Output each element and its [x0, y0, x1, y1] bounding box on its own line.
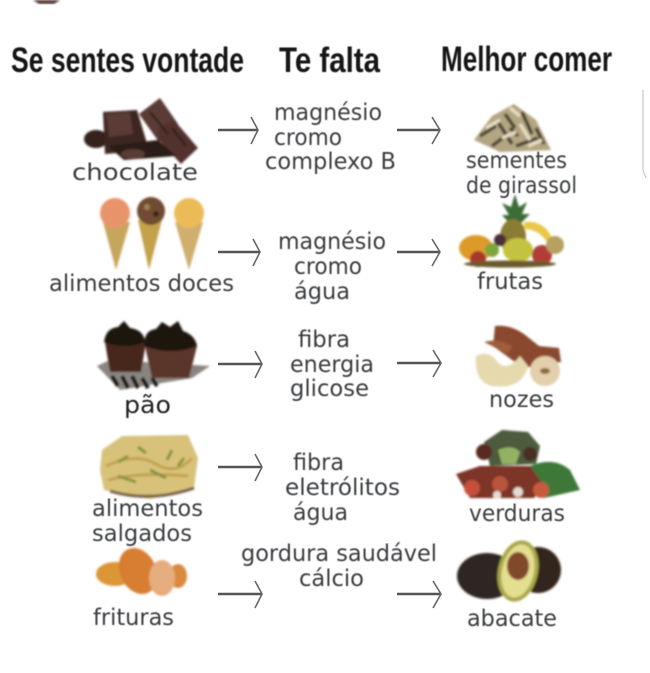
- text: deficiencies row 4: água: [293, 500, 348, 526]
- text: deficiencies row 5: [241, 541, 437, 592]
- text: deficiencies row 1: complexo B: [265, 149, 396, 175]
- label: alimentos doces: alimentos doces: [49, 271, 234, 297]
- text: deficiencies row 3: [290, 327, 374, 402]
- text: deficiencies row 3: glicose: [290, 376, 369, 402]
- text: deficiencies row 1: magnésio: [274, 100, 382, 126]
- label: verduras: verduras: [469, 501, 565, 527]
- label: nozes: nozes: [489, 387, 554, 413]
- text: deficiencies row 2: cromo: [294, 254, 362, 280]
- text: deficiencies row 4: eletrólitos: [285, 475, 400, 501]
- right edge line: [643, 90, 646, 178]
- icon: fruit: [459, 194, 564, 268]
- text: deficiencies row 4: fibra: [293, 450, 344, 476]
- text: deficiencies row 3: fibra: [298, 327, 350, 353]
- text: deficiencies row 4: [285, 450, 400, 526]
- arrow: [218, 581, 262, 608]
- text: deficiencies row 5: cálcio: [299, 566, 364, 592]
- heading: Se sentes vontade: Se sentes vontade: [11, 41, 244, 80]
- label: sementes de girassol: [466, 148, 577, 199]
- icon: ice cream cones: [100, 197, 204, 270]
- heading: Te falta: Te falta: [279, 41, 380, 80]
- label: sementes de girassol: de girassol: [466, 173, 577, 199]
- label: frutas: frutas: [477, 269, 543, 295]
- text: deficiencies row 1: cromo: [274, 125, 342, 151]
- text: deficiencies row 5: gordura saudável: [241, 541, 437, 567]
- arrow: [218, 239, 260, 266]
- text: deficiencies row 1: [265, 100, 396, 175]
- text: deficiencies row 2: [278, 229, 386, 305]
- arrow: [218, 117, 258, 144]
- arrow: [218, 351, 262, 378]
- arrow: [218, 454, 262, 481]
- icon: nuts: [476, 326, 561, 387]
- label: abacate: abacate: [467, 606, 557, 632]
- label: pão: pão: [124, 391, 171, 419]
- icon: chocolate: [84, 98, 198, 164]
- text: deficiencies row 3: energia: [290, 352, 374, 378]
- top cropped fragment: [33, 0, 60, 4]
- icon: fried nuggets: [96, 542, 187, 600]
- label: frituras: frituras: [93, 605, 174, 631]
- icon: vegetables: [456, 430, 580, 499]
- icon: avocado: [457, 537, 561, 605]
- label: sementes de girassol: sementes: [466, 148, 567, 174]
- label: alimentos salgados: alimentos: [92, 496, 203, 522]
- arrow: [397, 117, 440, 144]
- icon: salted chips: [100, 435, 198, 499]
- icon: cupcakes: [97, 321, 210, 390]
- text: deficiencies row 2: água: [294, 279, 350, 305]
- text: deficiencies row 2: magnésio: [278, 229, 386, 255]
- label: chocolate: chocolate: [72, 160, 198, 186]
- arrow: [397, 581, 441, 608]
- icon: sunflower seeds: [474, 104, 551, 152]
- label: alimentos salgados: salgados: [92, 521, 192, 547]
- headings: [11, 40, 612, 80]
- arrow: [397, 350, 441, 377]
- label: alimentos salgados: [92, 496, 203, 547]
- arrow: [397, 239, 440, 266]
